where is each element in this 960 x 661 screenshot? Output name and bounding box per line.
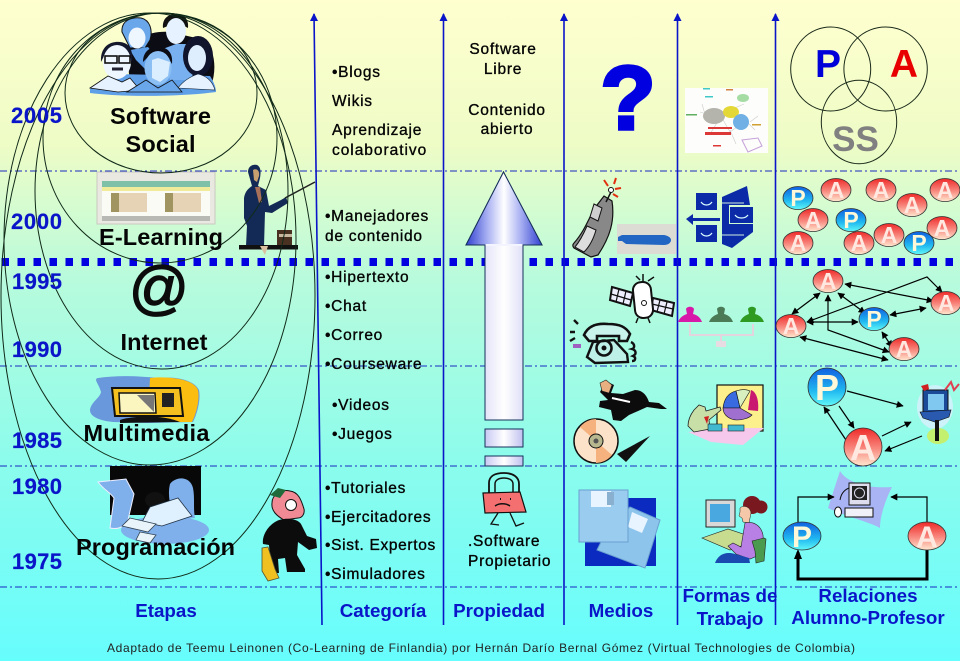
year labels: 1990 [12,337,62,362]
bubble letters: e-learning: P [790,185,806,211]
year labels: 1985 [12,428,62,453]
bubble letters: e-learning [790,177,953,256]
icon: floppy disks [579,490,660,568]
bubble letters: e-learning: A [828,177,844,203]
icon: sad padlock [483,473,526,526]
bubble relation: multimedia: A [850,427,876,468]
network of bubbles: internet: A [783,313,799,339]
column heading: medios: Medios [589,600,653,621]
column heading: relaciones: Relaciones [818,585,918,606]
property text: proprietary software: Propietario [468,553,551,570]
category texts: multimedia [332,397,393,443]
ellipse: programacion [1,13,315,579]
column heading: relaciones: Alumno-Profesor [791,607,945,628]
bubble letters: e-learning: A [937,177,953,203]
venn diagram: A [890,43,918,86]
bubble relation: multimedia: P [815,367,839,408]
category texts: internet [325,269,422,373]
bubble letters: e-learning: A [873,177,889,203]
year labels: 2005 [11,103,62,128]
icon: rotary telephone [570,320,636,363]
icon: three workers [678,307,764,347]
category texts: e-learning: •Manejadores [325,208,429,225]
bubble relation: programacion: A [916,521,938,554]
big arrow [466,172,542,466]
property text: proprietary software [468,533,551,570]
icon: e-learning screenshot [97,172,215,224]
icon: blue mailbox computer [917,382,959,444]
category texts: internet: •Correo [325,327,383,344]
icon: cartoon man with broom [262,488,317,581]
category texts: e-learning: de contenido [325,228,423,245]
bubble letters: e-learning: A [881,222,897,248]
network of bubbles: internet: A [896,336,912,362]
category texts: programacion [325,480,436,583]
column heading: formas de trabajo: Formas de [683,585,777,606]
icon: teacher with pointer [239,165,315,255]
bubble relation: multimedia [808,367,922,468]
bubble relation: programacion: P [792,521,812,554]
column arrows [310,13,780,625]
category texts: internet: •Hipertexto [325,269,409,286]
venn diagram [791,27,927,164]
bubble letters: e-learning: A [934,215,950,241]
category texts: internet: •Chat [325,298,367,315]
column heading: formas de trabajo: Trabajo [697,608,763,629]
category texts: software social: colaborativo [332,142,427,159]
category texts: multimedia: •Juegos [332,426,393,443]
stage label: internet: Internet [120,329,208,355]
year labels: 1980 [12,474,62,499]
icon: pie chart presenter [688,385,764,445]
network of bubbles: internet [776,268,960,362]
year labels: 1995 [12,269,62,294]
icon: usb stick [617,224,676,254]
property text: free software: Libre [484,61,522,78]
network of bubbles: internet: A [938,290,954,316]
category texts: e-learning [325,208,429,245]
column heading: etapas: Etapas [135,600,197,621]
icon: programmer asleep at desk [98,466,209,544]
category texts: software social: •Blogs [332,64,381,81]
category texts: software social: Wikis [332,93,373,110]
category texts: programacion: •Tutoriales [325,480,406,497]
icon: running man on cd [574,380,667,463]
category texts: software social: Aprendizaje [332,122,422,139]
column heading: propiedad: Propiedad [453,600,545,621]
icon: woman at computer [702,496,768,563]
stage label: software social: Software [110,103,211,129]
icon: mobile phone [573,178,621,257]
category texts: software social [332,64,427,159]
category texts: programacion: •Sist. Expertos [325,537,436,554]
category texts: internet: •Courseware [325,356,422,373]
icon: question mark: ? [601,49,655,149]
property text: free software [468,41,546,138]
row dividers [0,171,960,587]
bubble letters: e-learning: P [843,207,859,233]
bubble relation: programacion [783,497,946,579]
bubble letters: e-learning: A [851,230,867,256]
network of bubbles: internet: P [866,306,882,332]
column heading: categoria: Categoría [340,600,427,621]
column heading: relaciones [791,585,945,628]
icon: at sign: @ [129,255,189,321]
student-teacher bubbles: e-learning [783,178,960,254]
stage label: multimedia: Multimedia [84,420,210,446]
bubble letters: e-learning: A [790,230,806,256]
icon: computer with fan [828,471,892,528]
stage label: social: Social [126,131,196,157]
icon: people group [90,14,216,96]
ellipse: multimedia [4,13,296,465]
category texts: multimedia: •Videos [332,397,390,414]
ellipse: e-learning [43,13,277,263]
column heading: formas de trabajo [683,585,777,629]
icon: multimedia monitor [90,376,200,423]
category texts: programacion: •Simuladores [325,566,426,583]
property text: free software: Software [469,41,537,58]
stage label: e-learning: E-Learning [99,224,223,250]
category texts: programacion: •Ejercitadores [325,509,431,526]
footer credit: Adaptado de Teemu Leinonen (Co-Learning de Finlandia) por Hernán Darío Bernal Gómez (Virtual Technologies de Colombia) [107,641,855,655]
bubble letters: e-learning: A [805,207,821,233]
venn diagram: SS [832,120,879,159]
stage label: programacion: Programación [76,534,235,560]
icon: satellite [610,274,674,323]
property text: proprietary software: .Software [468,533,540,550]
icon: smiley workflow [686,186,753,248]
thick dashed divider [2,258,960,266]
year labels [11,103,62,574]
year labels: 2000 [11,209,62,234]
property text: free software: abierto [481,121,533,138]
property text: free software: Contenido [468,102,546,119]
ellipse: software social [65,13,257,173]
year labels: 1975 [12,549,62,574]
icon: network graph [685,88,768,153]
bubble letters: e-learning: A [904,192,920,218]
venn diagram: P [815,43,841,86]
ellipse: internet [35,13,288,369]
bubble letters: e-learning: P [911,230,927,256]
network of bubbles: internet: A [820,268,836,294]
